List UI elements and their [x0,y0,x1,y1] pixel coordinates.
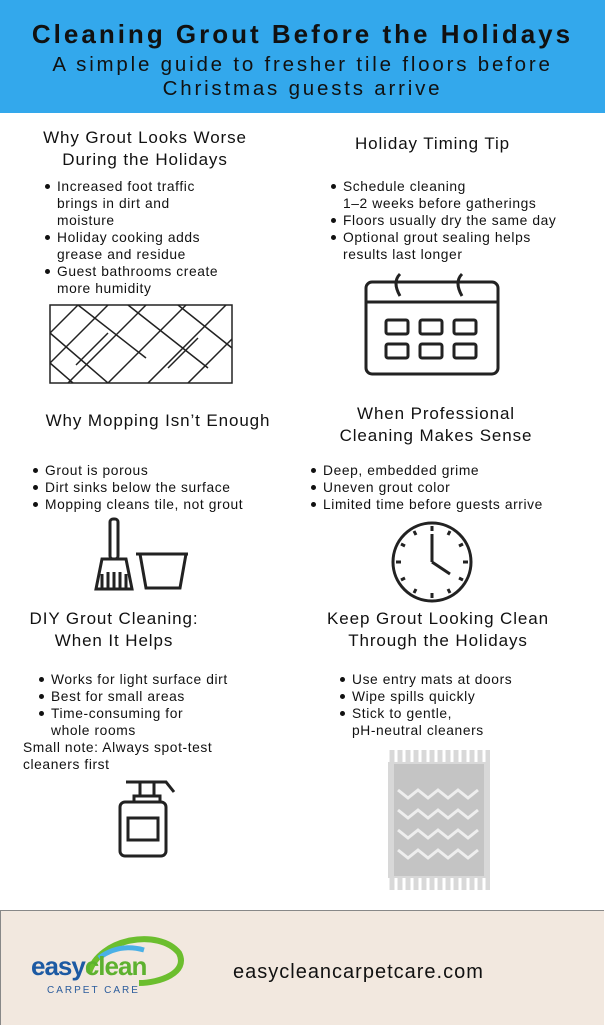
bullets: timing tip: 1–2 weeks before gatherings [343,196,536,211]
bullets: professional: Deep, embedded grime [323,463,479,478]
heading: why grout looks worse [43,128,247,169]
bullets: why grout looks worse: Increased foot traffic brings in dirt and moisture [57,179,195,228]
bullets: DIY: Time-consuming for [51,706,183,721]
logo: CARPET CARE [47,985,140,996]
icon: rug [388,750,490,890]
header banner [0,0,605,113]
bullets: DIY [39,672,228,738]
bullets: professional: Uneven grout color [323,480,450,495]
bullets: professional: Limited time before guests arrive [323,497,543,512]
heading: timing tip: Holiday Timing Tip [355,134,510,153]
bullets: mopping: Dirt sinks below the surface [45,480,230,495]
logo [31,936,184,996]
bullets: mopping: Grout is porous [45,463,148,478]
heading: mopping: Why Mopping Isn’t Enough [46,411,270,430]
bullets: keep clean: pH-neutral cleaners [352,723,484,738]
heading: why grout looks worse: Why Grout Looks Worse [43,128,247,147]
note: spot-test: cleaners first [23,757,110,772]
heading: keep clean: Through the Holidays [348,631,528,650]
bullets: why grout looks worse: Holiday cooking adds grease and residue [57,230,200,262]
icon: calendar [364,273,500,376]
bullets: mopping: Mopping cleans tile, not grout [45,497,243,512]
footer [0,910,604,1025]
logo: easyclean [31,951,146,981]
bullets: mopping [33,463,243,512]
heading: keep clean [327,609,549,650]
bullets: keep clean: Wipe spills quickly [352,689,475,704]
heading: DIY: DIY Grout Cleaning: [30,609,198,628]
icon: broom and bucket [94,518,188,590]
note: spot-test [23,740,212,772]
heading: why grout looks worse: During the Holidays [62,150,228,169]
bullets: keep clean: Use entry mats at doors [352,672,512,687]
note: spot-test: Small note: Always spot-test [23,740,212,755]
heading: professional: Cleaning Makes Sense [340,426,532,445]
heading: DIY: When It Helps [55,631,173,650]
bullets: why grout looks worse [45,179,218,296]
bullets: professional [311,463,543,512]
heading: professional: When Professional [357,404,515,423]
heading: professional [340,404,532,445]
icon: spray bottle [118,780,176,858]
icon: clock [392,522,472,602]
bullets: DIY: Best for small areas [51,689,185,704]
bullets: timing tip: Floors usually dry the same day [343,213,556,228]
website url: easycleancarpetcare.com [233,961,484,983]
bullets: keep clean [340,672,512,738]
bullets: DIY: Works for light surface dirt [51,672,228,687]
bullets: DIY: whole rooms [51,723,136,738]
title: Cleaning Grout Before the Holidays [32,19,573,49]
bullets: timing tip: Schedule cleaning [343,179,466,194]
heading: DIY [30,609,198,650]
subtitle: A simple guide to fresher tile floors before [52,53,553,76]
subtitle [52,53,553,100]
bullets: keep clean: Stick to gentle, [352,706,452,721]
bullets: why grout looks worse: Guest bathrooms create more humidity [57,264,218,296]
subtitle: Christmas guests arrive [163,77,442,100]
heading: keep clean: Keep Grout Looking Clean [327,609,549,628]
bullets: timing tip [331,179,556,262]
bullets: timing tip: Optional grout sealing helps results last longer [343,230,531,262]
icon: herringbone tile [49,304,233,384]
